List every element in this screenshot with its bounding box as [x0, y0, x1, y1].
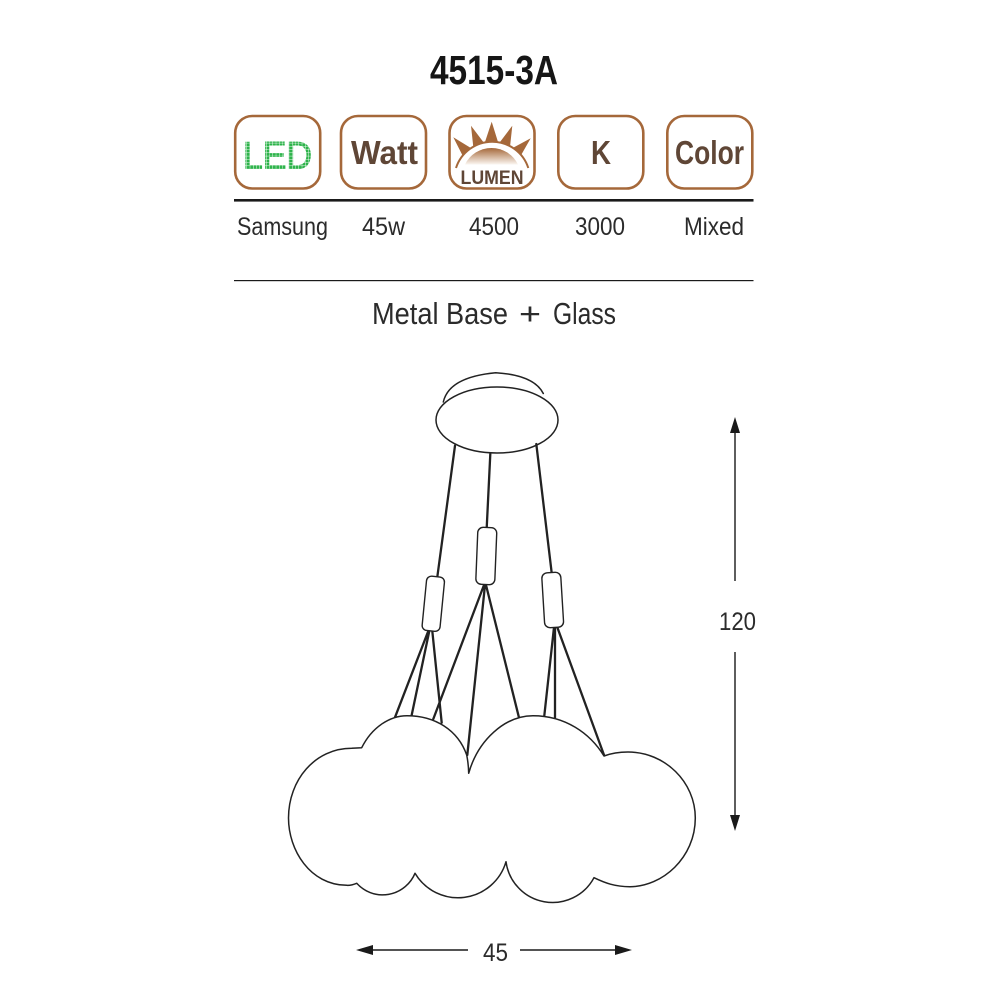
right connector — [542, 572, 564, 628]
material label: Glass — [553, 296, 616, 331]
height dimension — [719, 417, 756, 831]
width dimension — [356, 939, 632, 967]
icon: Color: Color — [675, 134, 744, 171]
icon: Lumen — [450, 116, 534, 189]
specification values — [237, 213, 744, 241]
suspension cables — [395, 444, 604, 755]
icon: Watt: Watt — [351, 134, 418, 171]
glass globes outline — [288, 716, 695, 902]
lamp drawing — [288, 373, 695, 902]
icon: K: K — [591, 134, 611, 171]
specification values: Mixed — [684, 213, 744, 241]
material label — [372, 296, 616, 331]
height value: 120 — [719, 608, 756, 636]
icon: Color — [667, 116, 752, 188]
middle connector — [476, 527, 497, 585]
ceiling canopy — [436, 373, 558, 453]
specification values: Samsung — [237, 213, 328, 241]
icon: LED — [235, 116, 320, 188]
left connector — [422, 576, 445, 632]
icon: Lumen: LUMEN — [460, 167, 524, 189]
icon: LED: LED — [243, 136, 312, 178]
arrow: width left — [356, 945, 468, 955]
arrow: height bottom — [730, 652, 740, 831]
specification values: 3000 — [575, 213, 625, 241]
arrow: height top — [730, 417, 740, 581]
title: 4515-3A — [430, 47, 558, 93]
arrow: width right — [520, 945, 632, 955]
material label: Metal Base — [372, 296, 508, 331]
width value: 45 — [483, 939, 508, 967]
icon: K — [558, 116, 643, 188]
material label: + — [519, 296, 541, 331]
icon: Watt — [341, 116, 426, 188]
specification values: 4500 — [469, 213, 519, 241]
specification values: 45w — [362, 213, 406, 241]
